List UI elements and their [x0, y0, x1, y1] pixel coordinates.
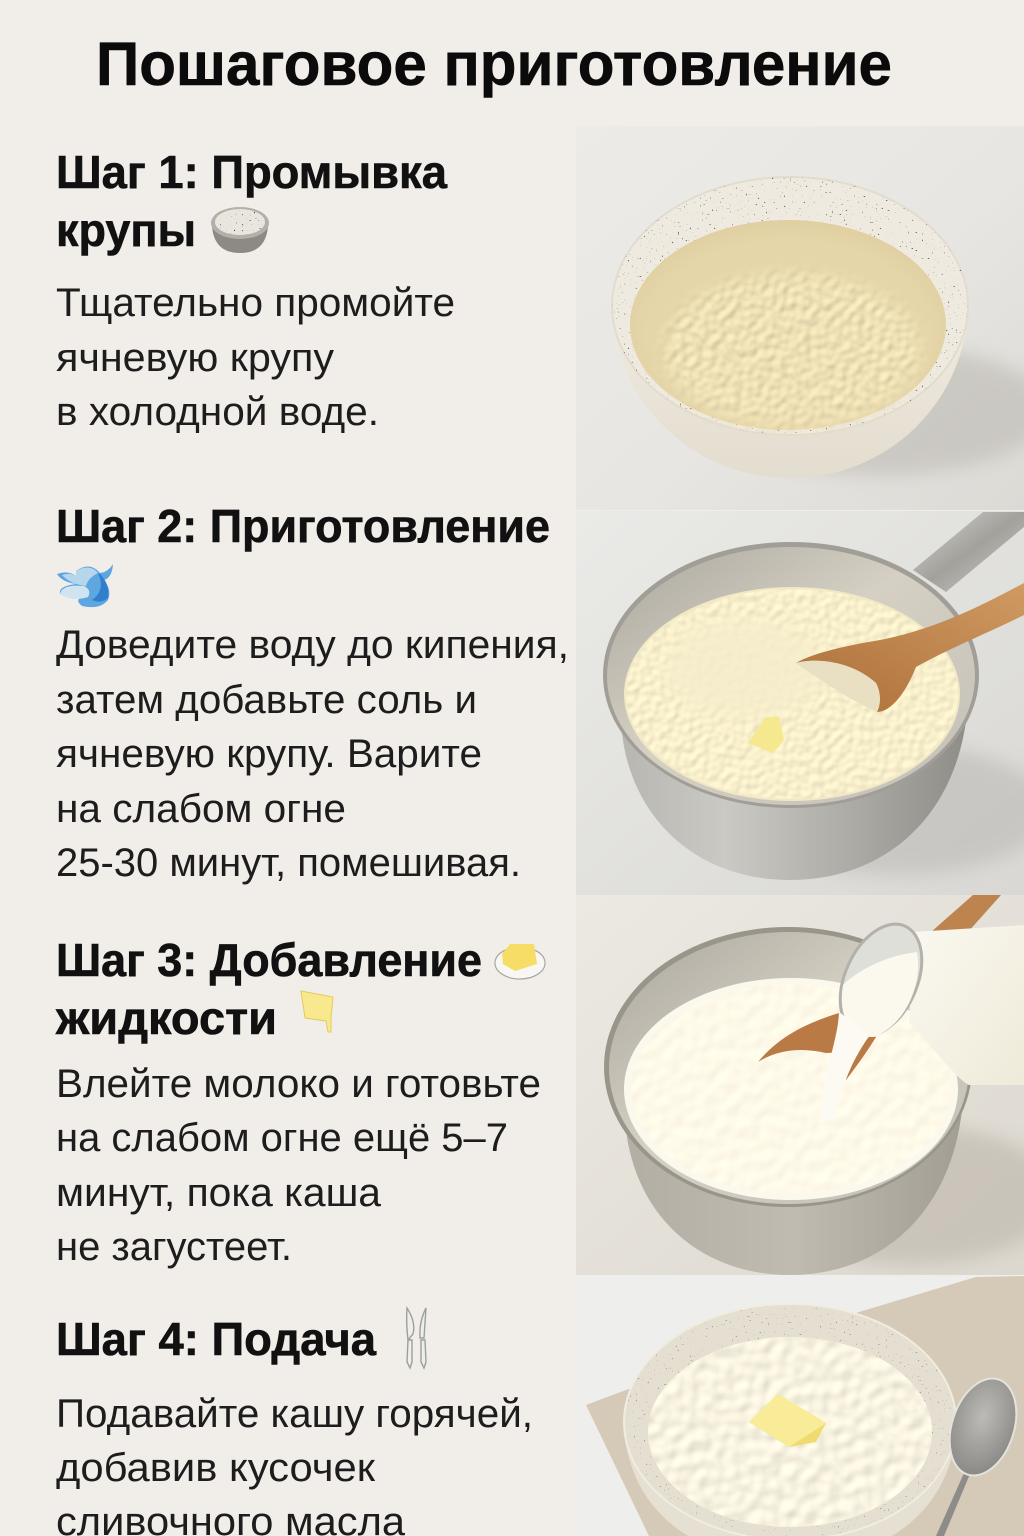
pan body [622, 724, 966, 880]
step 4 description: добавив кусочек [56, 1446, 376, 1490]
icon: blue wave [57, 564, 113, 607]
pan shadow [846, 748, 1024, 877]
step 4 description: Подавайте кашу горячей, [56, 1392, 533, 1436]
napkin [586, 1276, 1024, 1536]
step 4 description [56, 1392, 533, 1536]
step 1 heading: крупы [56, 204, 196, 256]
step 1 photo: bowl with grain in water [576, 126, 1024, 510]
step 3 description: минут, пока каша [56, 1171, 382, 1215]
step 1 description: ячневую крупу [56, 336, 334, 380]
step 2 description: 25-30 минут, помешивая. [56, 841, 521, 885]
milk jug [838, 922, 1024, 1085]
spoon handle [931, 895, 1001, 932]
spoon bowl [758, 1013, 876, 1080]
porridge [624, 587, 960, 801]
step 2 heading: Шаг 2: Приготовление [56, 500, 550, 552]
step 4 heading: Шаг 4: Подача [56, 1313, 376, 1365]
milk porridge [624, 978, 958, 1200]
milk stream [821, 1012, 870, 1120]
step 3 photo: pouring milk into pan [576, 895, 1024, 1275]
step 2 description: на слабом огне [56, 787, 346, 831]
step 1 heading: Шаг 1: Промывка [56, 146, 447, 198]
step 3 description: на слабом огне ещё 5–7 [56, 1116, 508, 1160]
step 4 photo: served porridge with butter [576, 1276, 1024, 1536]
step 3 heading [55, 934, 482, 1044]
pan rim [604, 927, 972, 1207]
step 3 heading: жидкости [55, 992, 277, 1044]
step 3 text block [55, 934, 545, 1269]
step 3 description: Влейте молоко и готовьте [56, 1062, 541, 1106]
icon: butter on plate [495, 944, 545, 979]
title: Пошаговое приготовление [96, 30, 892, 98]
bowl rim [624, 1304, 956, 1536]
icon: cutlery [407, 1308, 426, 1368]
step 1 description: в холодной воде. [56, 390, 379, 434]
pan handle [913, 512, 1024, 592]
step 2 description: ячневую крупу. Варите [56, 732, 482, 776]
step 2 photo: saucepan with spoon [576, 511, 1024, 895]
bowl shadow [826, 350, 1024, 479]
bowl body [626, 1445, 952, 1536]
step 2 text block [56, 500, 569, 885]
step 3 description [56, 1062, 541, 1269]
step 1 heading [56, 146, 447, 256]
icon: bowl of grain [211, 207, 269, 253]
step 2 description: затем добавьте соль и [56, 678, 477, 722]
bowl rim [612, 177, 968, 435]
butter [748, 717, 784, 753]
bowl body [618, 334, 965, 478]
step 2 description: Доведите воду до кипения, [56, 623, 569, 667]
broth [630, 220, 946, 430]
step 1 description [56, 281, 455, 434]
grains [664, 272, 920, 434]
step 2 description [56, 623, 569, 885]
step 3 description: не загустеет. [56, 1225, 292, 1269]
pan shadow [854, 1125, 1024, 1268]
step 3 heading: Шаг 3: Добавление [56, 934, 482, 986]
step 4 text block [56, 1308, 533, 1536]
pan rim [603, 542, 979, 808]
butter [749, 1394, 826, 1447]
spoon [936, 1378, 1018, 1536]
step 1 description: Тщательно промойте [56, 281, 455, 325]
wooden spoon [796, 583, 1024, 712]
pan body [625, 1110, 962, 1275]
step 1 text block [56, 146, 455, 434]
icon: butter piece [301, 991, 333, 1032]
porridge [648, 1337, 932, 1527]
